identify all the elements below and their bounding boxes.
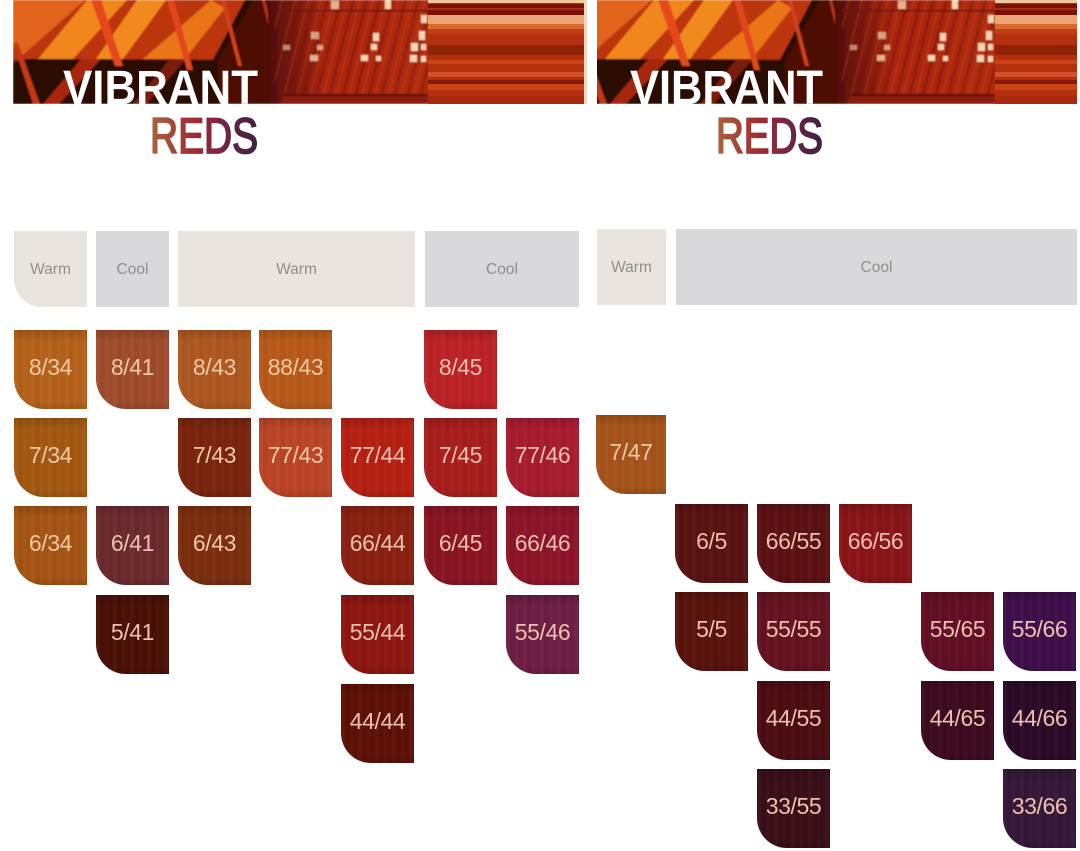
swatch 66/56: 66/56: [848, 528, 903, 554]
swatch 88/43: [259, 330, 332, 409]
swatch 44/66: 44/66: [1012, 705, 1067, 731]
swatch 6/41: 6/41: [111, 530, 154, 556]
swatch 44/55: [757, 681, 830, 760]
swatch 5/5: [675, 592, 748, 671]
swatch 66/55: [757, 504, 830, 583]
swatch 33/55: 33/55: [766, 793, 821, 819]
swatch 55/44: [341, 595, 414, 674]
swatch 55/66: [1003, 592, 1076, 671]
swatch 6/41: [96, 506, 169, 585]
header: cool wide: Cool: [486, 261, 518, 278]
swatch 6/34: [14, 506, 87, 585]
swatch 6/43: 6/43: [193, 530, 236, 556]
swatch 6/5: [675, 504, 748, 583]
swatch 55/44: 55/44: [350, 619, 405, 645]
swatch 66/44: 66/44: [350, 530, 405, 556]
swatch 44/55: 44/55: [766, 705, 821, 731]
swatch 8/34: 8/34: [29, 354, 72, 380]
swatch 5/41: [96, 595, 169, 674]
swatch 66/46: 66/46: [515, 530, 570, 556]
swatch 66/44: [341, 506, 414, 585]
swatch 55/46: [506, 595, 579, 674]
swatch 8/34: [14, 330, 87, 409]
swatch 77/43: 77/43: [268, 442, 323, 468]
swatch 7/43: 7/43: [193, 442, 236, 468]
banner: left: [13, 0, 587, 104]
swatch 44/44: 44/44: [350, 708, 405, 734]
swatch 6/45: [424, 506, 497, 585]
header: cool wide: [676, 229, 1077, 305]
swatch 44/66: [1003, 681, 1076, 760]
header: warm: [14, 231, 87, 307]
swatch 6/43: [178, 506, 251, 585]
swatch 6/5: 6/5: [696, 528, 727, 554]
swatch 7/43: [178, 418, 251, 497]
swatch 8/45: [424, 330, 497, 409]
swatch 44/65: 44/65: [930, 705, 985, 731]
swatch 44/44: [341, 684, 414, 763]
header: cool wide: [425, 231, 579, 307]
swatch 8/41: [96, 330, 169, 409]
swatch 33/55: [757, 769, 830, 848]
swatch 7/45: [424, 418, 497, 497]
swatch 55/65: 55/65: [930, 616, 985, 642]
swatch 8/41: 8/41: [111, 354, 154, 380]
swatch 7/47: 7/47: [609, 439, 653, 465]
swatch 77/44: 77/44: [350, 442, 405, 468]
swatch 77/43: [259, 418, 332, 497]
header: cool: Cool: [117, 261, 148, 278]
swatch 44/65: [921, 681, 994, 760]
swatch 7/34: 7/34: [29, 442, 72, 468]
swatch 66/46: [506, 506, 579, 585]
header: warm: [597, 229, 666, 305]
swatch 55/55: 55/55: [766, 616, 821, 642]
header: cool wide: Cool: [861, 259, 892, 276]
swatch 66/55: 66/55: [766, 528, 821, 554]
swatch 6/45: 6/45: [439, 530, 482, 556]
banner: right: [597, 0, 1077, 104]
swatch 77/46: 77/46: [515, 442, 570, 468]
swatch 5/41: 5/41: [111, 619, 154, 645]
header: warm wide: [178, 231, 415, 307]
swatch 66/56: [839, 504, 912, 583]
swatch 8/43: [178, 330, 251, 409]
swatch 88/43: 88/43: [268, 354, 323, 380]
header: cool: [96, 231, 169, 307]
swatch 55/66: 55/66: [1012, 616, 1067, 642]
swatch 8/45: 8/45: [439, 354, 482, 380]
swatch 55/55: [757, 592, 830, 671]
swatch 33/66: 33/66: [1012, 793, 1067, 819]
swatch 7/47: [596, 415, 666, 494]
swatch 77/46: [506, 418, 579, 497]
swatch 33/66: [1003, 769, 1076, 848]
swatch 7/34: [14, 418, 87, 497]
swatch 5/5: 5/5: [696, 616, 727, 642]
header: warm wide: Warm: [276, 261, 317, 278]
swatch 7/45: 7/45: [439, 442, 482, 468]
swatch 55/46: 55/46: [515, 619, 570, 645]
swatch 55/65: [921, 592, 994, 671]
header: warm: Warm: [611, 259, 652, 276]
swatch 8/43: 8/43: [193, 354, 236, 380]
header: warm: Warm: [30, 261, 71, 278]
swatch 6/34: 6/34: [29, 530, 72, 556]
swatch 77/44: [341, 418, 414, 497]
